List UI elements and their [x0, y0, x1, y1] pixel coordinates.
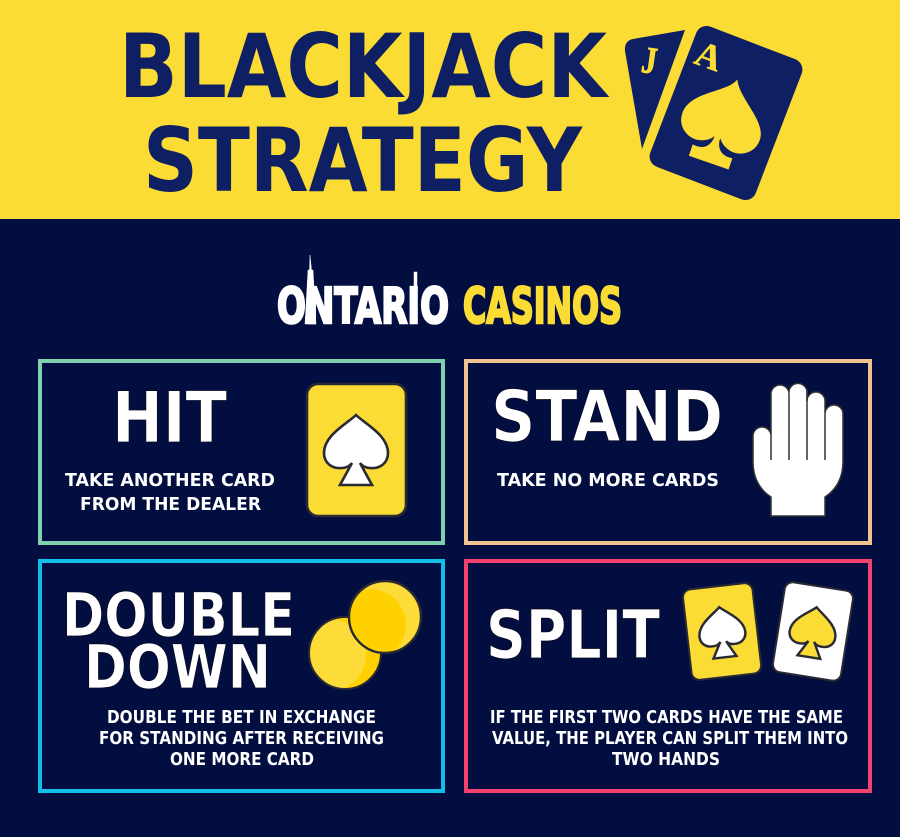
text: split description — [490, 707, 848, 770]
icon: hand — [753, 383, 843, 516]
text: double down description: ONE MORE CARD — [170, 749, 314, 770]
title: BLACKJACK — [119, 15, 609, 118]
logo: Ontario wordmark — [277, 255, 449, 335]
title: STRATEGY — [143, 109, 583, 212]
text: double down description: DOUBLE THE BET IN EXCHANGE — [107, 707, 376, 728]
text: stand description: TAKE NO MORE CARDS — [497, 470, 719, 491]
heading: double down: DOUBLE — [62, 580, 295, 651]
icon: playing cards: A — [690, 33, 728, 79]
logo — [277, 255, 622, 335]
icon: playing cards — [625, 23, 806, 203]
header banner — [0, 0, 900, 219]
logo: Ontario wordmark: ONTARIO — [277, 278, 449, 335]
heading: double down — [62, 580, 295, 703]
panel: stand — [466, 361, 870, 543]
icon: spade card — [307, 384, 406, 516]
text: double down description — [99, 707, 384, 770]
logo: Casinos wordmark: CASINOS — [463, 278, 622, 335]
panel: double down — [40, 561, 443, 791]
text: hit description: FROM THE DEALER — [80, 494, 261, 515]
text: split description: TWO HANDS — [612, 749, 720, 770]
text: hit description: TAKE ANOTHER CARD — [65, 470, 275, 491]
icon: coins — [294, 581, 421, 691]
icon: white card — [772, 581, 854, 682]
text: hit description — [65, 470, 275, 515]
panel: split — [466, 561, 870, 791]
text: double down description: FOR STANDING AFTER RECEIVING — [99, 728, 384, 749]
heading: hit: HIT — [112, 377, 227, 459]
heading: double down: DOWN — [84, 632, 271, 703]
title — [119, 15, 609, 212]
icon: yellow card — [682, 582, 762, 681]
panel: hit — [40, 361, 443, 543]
icon: playing cards: J — [639, 39, 660, 83]
heading: split: SPLIT — [486, 596, 660, 674]
heading: stand: STAND — [491, 376, 723, 458]
